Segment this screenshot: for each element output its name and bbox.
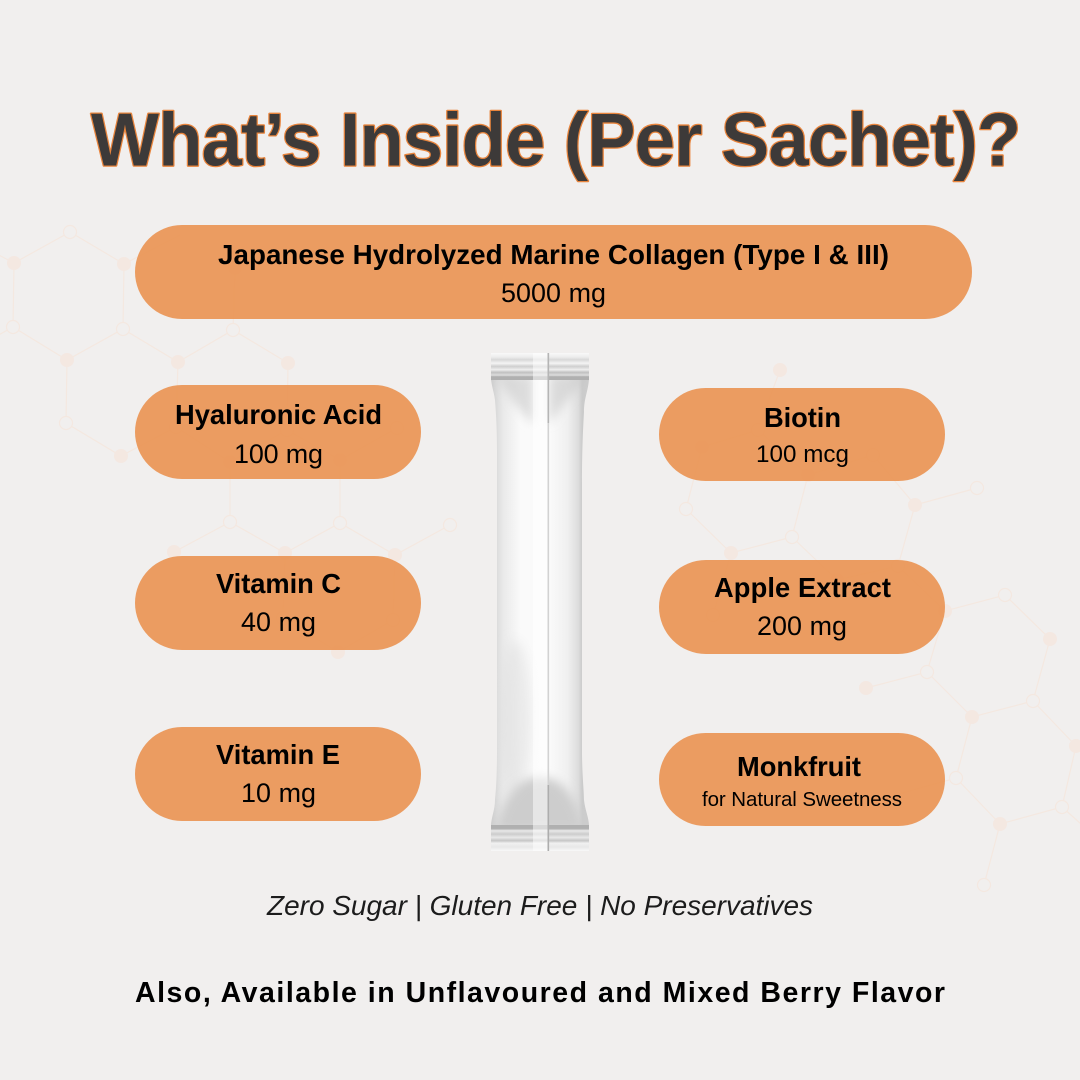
panel: hyaluronic acid bbox=[135, 385, 421, 479]
panel: vitamin E: Vitamin E bbox=[216, 739, 340, 770]
panel: biotin bbox=[659, 388, 945, 481]
panel: vitamin C bbox=[135, 556, 421, 650]
panel: apple extract: Apple Extract bbox=[714, 572, 891, 603]
panel: biotin: 100 mcg bbox=[756, 441, 849, 468]
molecule pattern: right bbox=[680, 363, 1080, 892]
panel: marine collagen: Japanese Hydrolyzed Marine Collagen (Type I & III) bbox=[218, 239, 889, 270]
panel: monkfruit: Monkfruit bbox=[737, 751, 861, 782]
panel: hyaluronic acid: 100 mg bbox=[234, 439, 323, 469]
panel: vitamin C: 40 mg bbox=[241, 607, 316, 637]
panel: marine collagen bbox=[135, 225, 972, 319]
panel: vitamin E bbox=[135, 727, 421, 821]
title: What’s Inside (Per Sachet)? bbox=[91, 97, 1021, 182]
panel: apple extract bbox=[659, 560, 945, 654]
claims line: Zero Sugar | Gluten Free | No Preservatives bbox=[266, 890, 813, 921]
panel: biotin: Biotin bbox=[764, 402, 841, 433]
panel: marine collagen: 5000 mg bbox=[501, 278, 606, 308]
panel: monkfruit: for Natural Sweetness bbox=[702, 788, 902, 811]
flavour note: Also, Available in Unflavoured and Mixed Berry Flavor bbox=[135, 977, 945, 1009]
panel: vitamin E: 10 mg bbox=[241, 778, 316, 808]
panel: hyaluronic acid: Hyaluronic Acid bbox=[175, 399, 382, 430]
sachet bbox=[491, 353, 589, 851]
panel: monkfruit bbox=[659, 733, 945, 826]
panel: vitamin C: Vitamin C bbox=[216, 568, 341, 599]
panel: apple extract: 200 mg bbox=[757, 611, 847, 641]
molecule pattern: left bbox=[0, 226, 456, 659]
